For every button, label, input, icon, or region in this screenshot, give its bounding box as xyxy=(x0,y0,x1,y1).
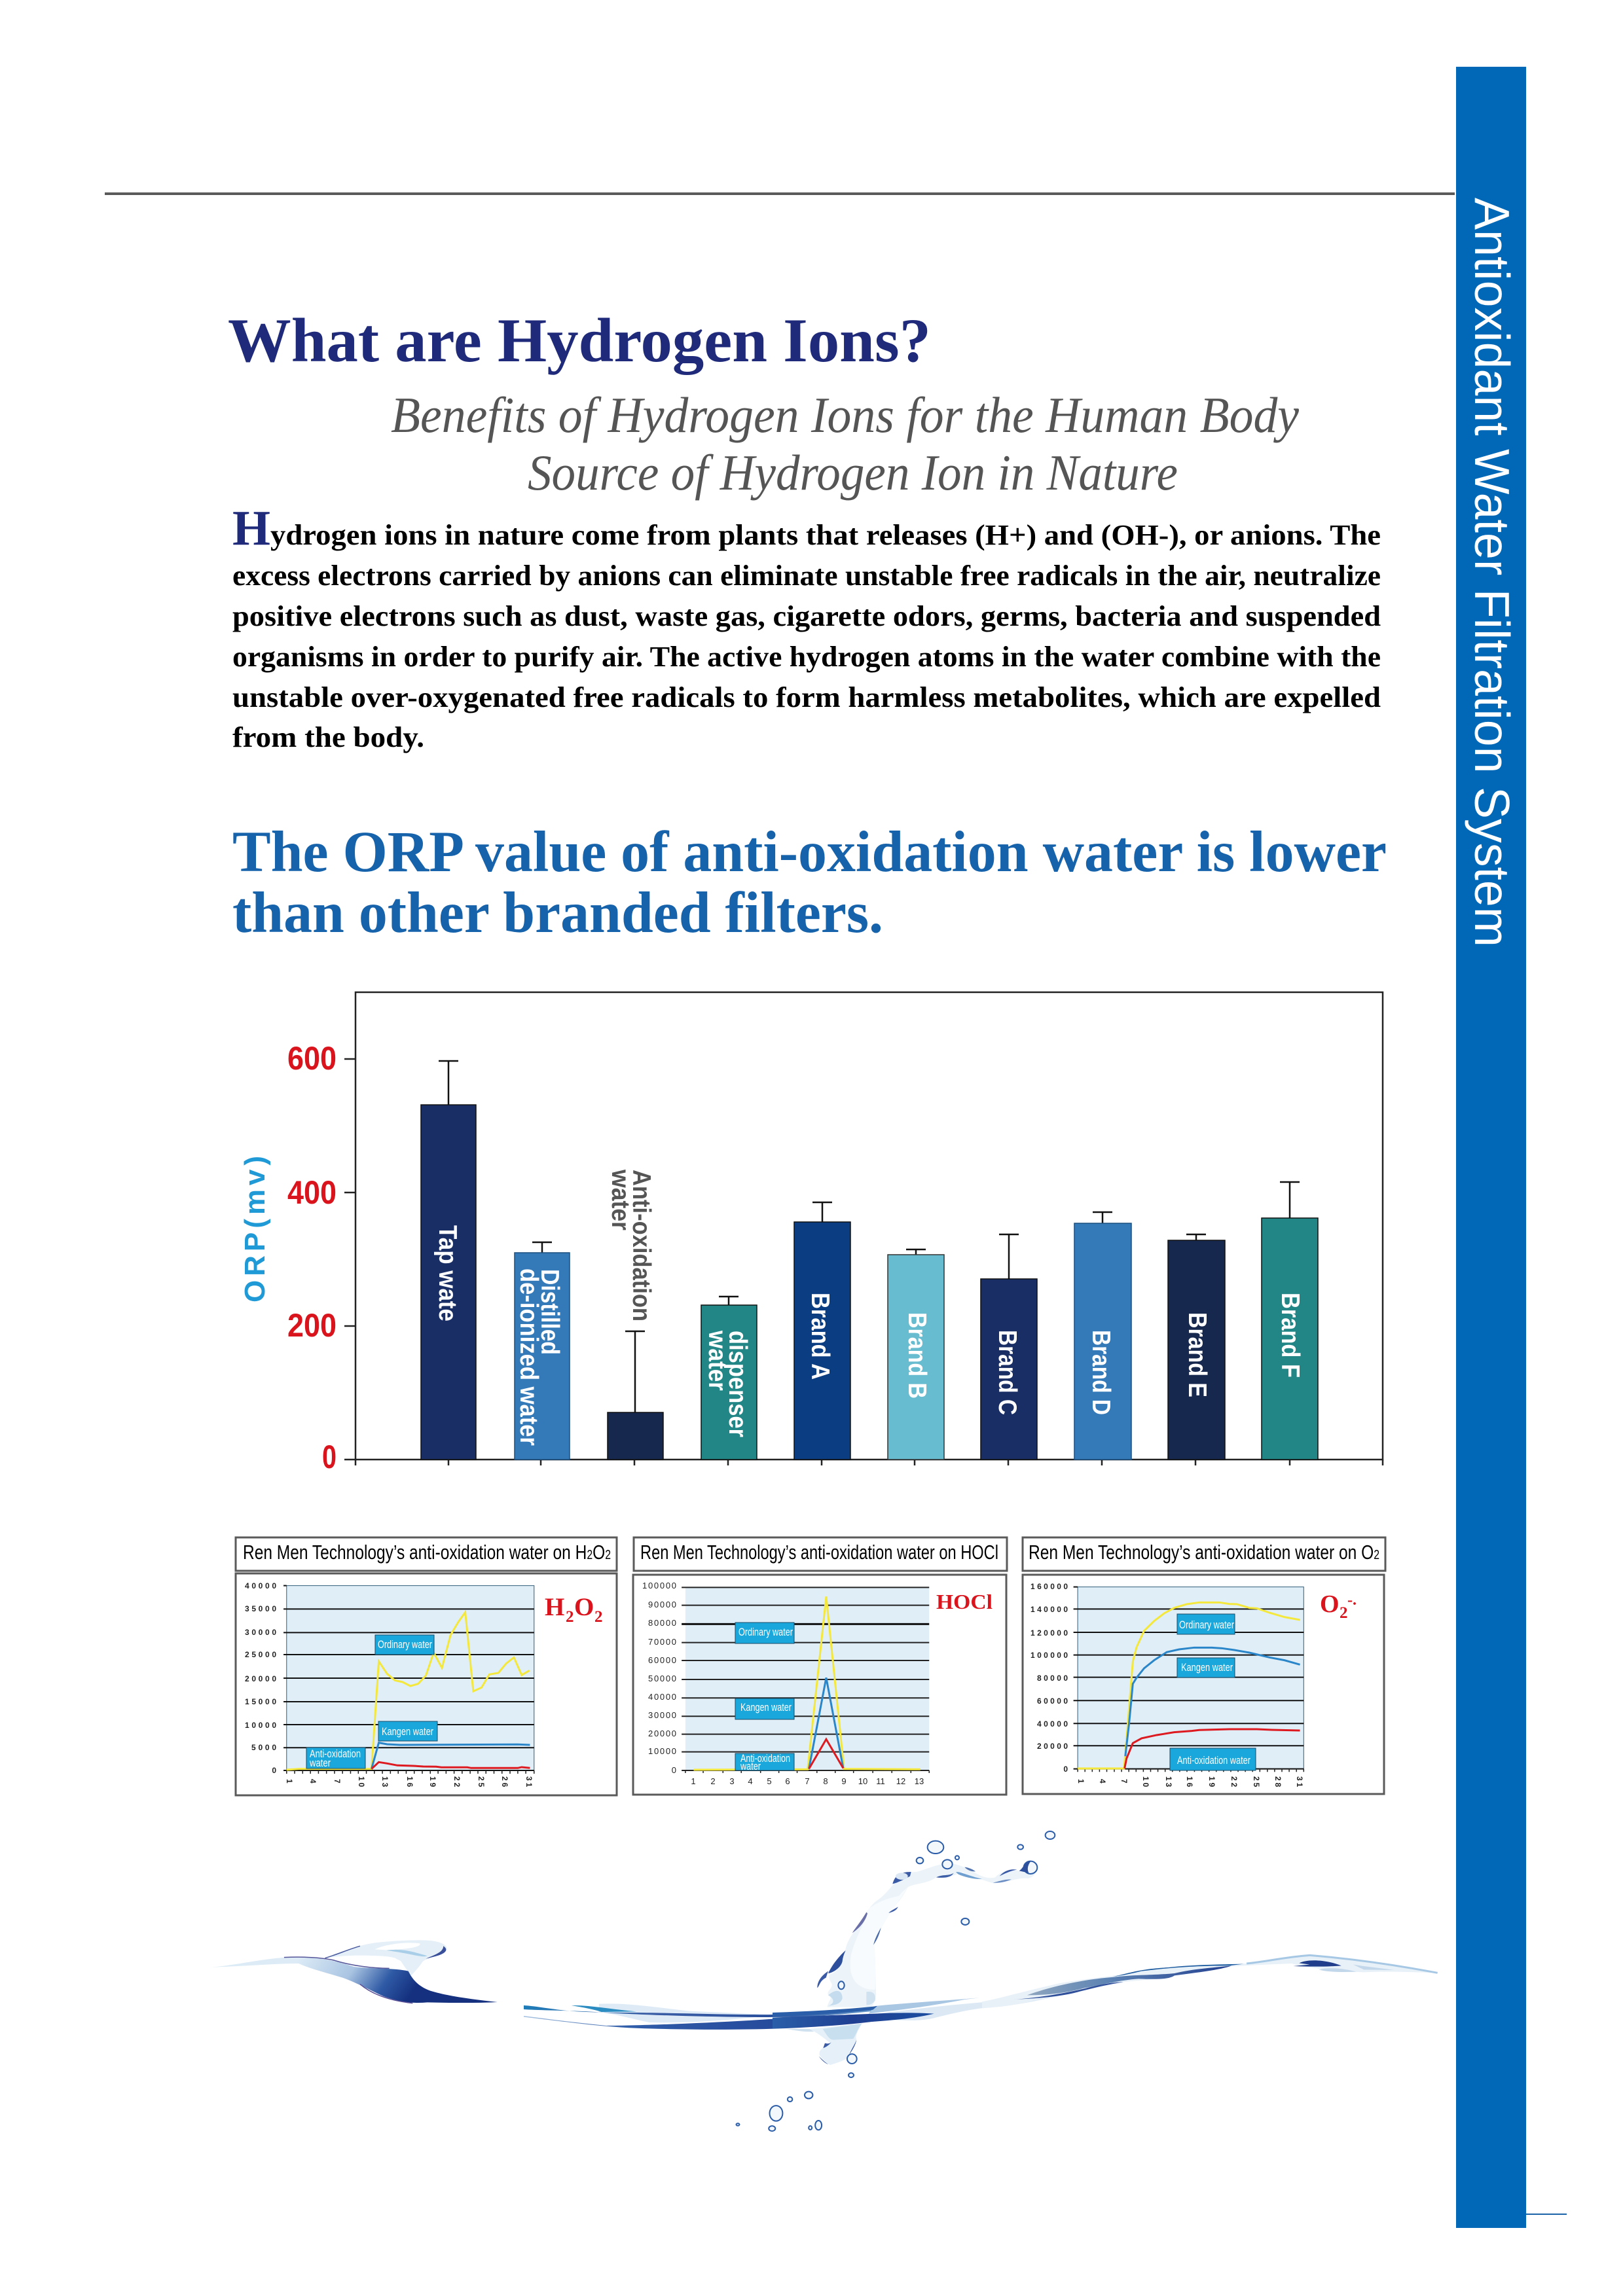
chart title: HOCl xyxy=(634,1537,1007,1571)
x axis labels: 19 xyxy=(1207,1776,1216,1789)
formula: HOCl: HOCl xyxy=(936,1590,993,1613)
label: ordinary water xyxy=(735,1623,794,1643)
x axis labels xyxy=(1076,1776,1304,1789)
y axis labels: 5000 xyxy=(251,1743,276,1752)
label: ordinary water: Ordinary water xyxy=(1179,1619,1234,1631)
splash: central water bands xyxy=(524,2003,875,2030)
label: anti-oxidation water: water xyxy=(740,1760,761,1772)
bar: tap water xyxy=(421,1105,476,1460)
y axis tick labels: 400 xyxy=(287,1174,337,1211)
x axis labels: 3 xyxy=(729,1776,735,1786)
y axis tick labels: 200 xyxy=(287,1307,337,1344)
label: anti-oxidation water: Anti-oxidation water xyxy=(1177,1754,1250,1767)
x axis labels: 10 xyxy=(1141,1776,1150,1789)
x axis labels: 9 xyxy=(841,1776,847,1786)
bar: distilled de-ionized water: de-ionized water xyxy=(515,1268,543,1446)
line: kangen water xyxy=(371,1743,530,1769)
y axis labels: 80000 xyxy=(1037,1674,1068,1683)
bar chart: ORP values xyxy=(239,992,1383,1475)
line: kangen water xyxy=(1125,1647,1300,1756)
bar: distilled de-ionized water xyxy=(515,1253,570,1460)
label: kangen water: Kangen water xyxy=(1181,1661,1233,1674)
y axis labels xyxy=(642,1581,676,1775)
y axis labels: 25000 xyxy=(245,1650,276,1659)
x axis labels: 28 xyxy=(1273,1776,1283,1789)
line: anti-oxidation water xyxy=(1125,1729,1300,1768)
label: anti-oxidation water xyxy=(735,1752,794,1772)
bar: brand E: Brand E xyxy=(1183,1312,1211,1397)
section heading: The ORP value of anti-oxidation water is lower xyxy=(232,820,1387,884)
y axis labels: 100000 xyxy=(642,1581,676,1590)
x axis labels: 2 xyxy=(710,1776,716,1786)
chart title: O2: Ren Men Technology’s anti-oxidation water on O2 xyxy=(1029,1541,1379,1564)
y axis labels: 10000 xyxy=(648,1746,676,1756)
line: ordinary water xyxy=(287,1612,530,1770)
illustration: water splash xyxy=(211,1831,1438,2131)
label: ordinary water: Ordinary water xyxy=(378,1638,432,1651)
bar: brand A: Brand A xyxy=(806,1293,834,1380)
x axis labels: 4 xyxy=(308,1779,318,1785)
x axis labels: 5 xyxy=(767,1776,772,1786)
chart title: O2 xyxy=(1023,1537,1385,1571)
x axis labels xyxy=(691,1776,924,1786)
x axis labels: 22 xyxy=(452,1776,462,1789)
formula: O2 radical: 2 xyxy=(1340,1604,1347,1622)
formula: H2O2: O xyxy=(574,1593,594,1621)
splash: left wave xyxy=(211,1940,498,2003)
line: kangen water xyxy=(809,1677,843,1769)
sidebar title: Antioxidant Water Filtration System xyxy=(1465,198,1520,947)
body paragraph: H xyxy=(232,501,270,556)
label: kangen water: Kangen water xyxy=(740,1701,792,1713)
bar: brand F: Brand F xyxy=(1276,1293,1304,1378)
formula: H2O2: H xyxy=(545,1593,564,1621)
y axis tick labels xyxy=(287,1040,337,1475)
x axis labels: 7 xyxy=(1120,1779,1129,1785)
bar: dispenser water: dispenser xyxy=(723,1331,752,1437)
label: ordinary water: Ordinary water xyxy=(739,1626,793,1638)
subtitle block: Benefits of Hydrogen Ions for the Human Body xyxy=(391,387,1300,443)
y axis labels: 60000 xyxy=(1037,1696,1068,1706)
bar: brand F xyxy=(1262,1218,1318,1460)
sidebar: vertical blue band xyxy=(1456,67,1526,2228)
error bars xyxy=(439,1061,1300,1412)
section heading xyxy=(232,820,1387,945)
label: kangen water: Kangen water xyxy=(382,1725,433,1738)
bar: dispenser water xyxy=(701,1305,757,1460)
body paragraph: from the body. xyxy=(232,721,424,753)
x axis labels: 31 xyxy=(524,1776,534,1789)
x axis labels: 16 xyxy=(405,1776,414,1789)
chart panel: H2O2 xyxy=(236,1537,617,1795)
label: anti-oxidation water xyxy=(1170,1748,1256,1770)
body paragraph xyxy=(232,501,1381,753)
x axis labels: 4 xyxy=(748,1776,753,1786)
x axis labels: 13 xyxy=(915,1776,924,1786)
body paragraph: unstable over-oxygenated free radicals to form harmless metabolites, which are expelled xyxy=(232,681,1381,713)
x axis labels: 6 xyxy=(785,1776,790,1786)
y axis labels: 160000 xyxy=(1030,1582,1068,1591)
y axis labels: 0 xyxy=(1063,1765,1068,1774)
y axis labels: 40000 xyxy=(245,1581,276,1590)
subtitle block xyxy=(391,387,1300,501)
bar: brand D: Brand D xyxy=(1087,1330,1115,1415)
formula: H2O2: 2 xyxy=(594,1608,602,1626)
x axis labels: 16 xyxy=(1185,1776,1194,1789)
bar: brand C xyxy=(981,1279,1037,1460)
label: kangen water xyxy=(378,1721,437,1741)
x axis labels: 26 xyxy=(500,1776,509,1789)
formula: H2O2: 2 xyxy=(566,1608,574,1626)
y axis labels: 20000 xyxy=(648,1729,676,1738)
bar: brand B: Brand B xyxy=(903,1312,931,1399)
line: ordinary water xyxy=(1078,1602,1300,1768)
body paragraph: positive electrons such as dust, waste gas, cigarette odors, germs, bacteria and suspended xyxy=(232,600,1381,632)
y axis title: ORP(mv) xyxy=(239,1156,271,1302)
bar: anti-oxidation water: Anti-oxidation xyxy=(627,1170,655,1321)
section heading: than other branded filters. xyxy=(232,881,883,945)
bar: brand C: Brand C xyxy=(993,1330,1021,1415)
y axis labels: 70000 xyxy=(648,1637,676,1647)
formula: O2 radical: O xyxy=(1320,1590,1340,1618)
chart title: H2O2 xyxy=(236,1537,617,1571)
body paragraph: ydrogen ions in nature come from plants that releases (H+) and (OH-), or anions. The xyxy=(270,519,1381,551)
subtitle block: Source of Hydrogen Ion in Nature xyxy=(528,444,1178,501)
bar: tap water: Tap wate xyxy=(433,1225,462,1321)
label: kangen water xyxy=(735,1698,794,1719)
label: kangen water xyxy=(1177,1658,1235,1677)
label: ordinary water xyxy=(375,1635,434,1655)
line: ordinary water xyxy=(694,1596,921,1770)
chart panel: HOCl xyxy=(633,1537,1007,1795)
x axis labels: 7 xyxy=(333,1779,342,1785)
splash: falling droplets xyxy=(737,2092,822,2131)
y axis labels: 140000 xyxy=(1030,1605,1068,1614)
formula: O2 radical: -. xyxy=(1347,1592,1357,1609)
bar: brand A xyxy=(794,1222,850,1460)
x axis labels: 31 xyxy=(1295,1776,1304,1789)
label: anti-oxidation water: water xyxy=(309,1757,331,1769)
bar: dispenser water: water xyxy=(703,1330,731,1391)
y axis labels: 100000 xyxy=(1030,1651,1068,1660)
splash: right wave xyxy=(982,1955,1438,2008)
label: anti-oxidation water xyxy=(306,1748,365,1769)
bar: brand E xyxy=(1168,1240,1225,1460)
x axis labels: 19 xyxy=(428,1776,437,1789)
label: ordinary water xyxy=(1177,1614,1235,1634)
y axis labels: 15000 xyxy=(245,1697,276,1706)
y axis tick labels: 0 xyxy=(322,1439,337,1475)
y axis labels: 20000 xyxy=(1037,1742,1068,1751)
bar: anti-oxidation water xyxy=(606,1169,663,1460)
splash: vertical stream and right band start xyxy=(773,1831,1074,2077)
x axis labels: 10 xyxy=(357,1776,366,1789)
chart title: H2O2: Ren Men Technology’s anti-oxidation water on H2O2 xyxy=(243,1541,611,1564)
x axis labels: 12 xyxy=(896,1776,905,1786)
x axis labels: 13 xyxy=(380,1776,390,1789)
bar: anti-oxidation water: water xyxy=(606,1169,634,1230)
x axis labels: 25 xyxy=(477,1776,486,1789)
label: anti-oxidation water: Anti-oxidation xyxy=(310,1748,361,1760)
label: anti-oxidation water: Anti-oxidation xyxy=(740,1752,790,1765)
y axis labels: 20000 xyxy=(245,1674,276,1683)
y axis labels: 120000 xyxy=(1030,1628,1068,1638)
plot area xyxy=(1074,1587,1304,1772)
line: anti-oxidation water xyxy=(809,1739,843,1769)
y axis labels: 50000 xyxy=(648,1674,676,1683)
x axis labels xyxy=(285,1776,534,1789)
y axis labels: 30000 xyxy=(245,1628,276,1637)
chart title: HOCl: Ren Men Technology’s anti-oxidation water on HOCl xyxy=(640,1541,998,1564)
x axis labels: 13 xyxy=(1164,1776,1173,1789)
y axis labels: 80000 xyxy=(648,1618,676,1628)
y axis labels: 0 xyxy=(672,1765,676,1775)
y axis labels: 40000 xyxy=(648,1692,676,1702)
x axis labels: 1 xyxy=(285,1779,294,1785)
y axis labels: 30000 xyxy=(648,1710,676,1720)
plot area xyxy=(682,1587,929,1773)
y axis labels: 10000 xyxy=(245,1721,276,1730)
bar: distilled de-ionized water: Distilled xyxy=(536,1269,564,1355)
body paragraph: excess electrons carried by anions can eliminate unstable free radicals in the air, neutralize xyxy=(232,560,1381,592)
x axis labels: 1 xyxy=(1076,1779,1085,1785)
y axis labels xyxy=(1030,1582,1068,1774)
body paragraph: organisms in order to purify air. The active hydrogen atoms in the water combine with the xyxy=(232,641,1381,673)
y axis labels: 60000 xyxy=(648,1655,676,1665)
y axis labels xyxy=(245,1581,276,1775)
main title: What are Hydrogen Ions? xyxy=(228,306,931,375)
x axis labels: 8 xyxy=(823,1776,828,1786)
x axis labels: 22 xyxy=(1230,1776,1239,1789)
y axis labels: 0 xyxy=(272,1766,276,1775)
y axis labels: 40000 xyxy=(1037,1719,1068,1729)
bar: brand B xyxy=(888,1255,944,1460)
y axis labels: 35000 xyxy=(245,1604,276,1613)
x axis labels: 7 xyxy=(805,1776,810,1786)
bar: brand D xyxy=(1074,1223,1131,1460)
x axis labels: 25 xyxy=(1252,1776,1261,1789)
line: anti-oxidation water xyxy=(371,1762,530,1769)
x axis labels: 10 xyxy=(858,1776,867,1786)
chart panel: O2 xyxy=(1023,1537,1385,1794)
y axis tick labels: 600 xyxy=(287,1040,337,1077)
x axis labels: 1 xyxy=(691,1776,696,1786)
x axis labels: 11 xyxy=(876,1776,885,1786)
plot area xyxy=(283,1586,534,1774)
y axis labels: 90000 xyxy=(648,1600,676,1609)
x axis labels: 4 xyxy=(1098,1779,1107,1785)
